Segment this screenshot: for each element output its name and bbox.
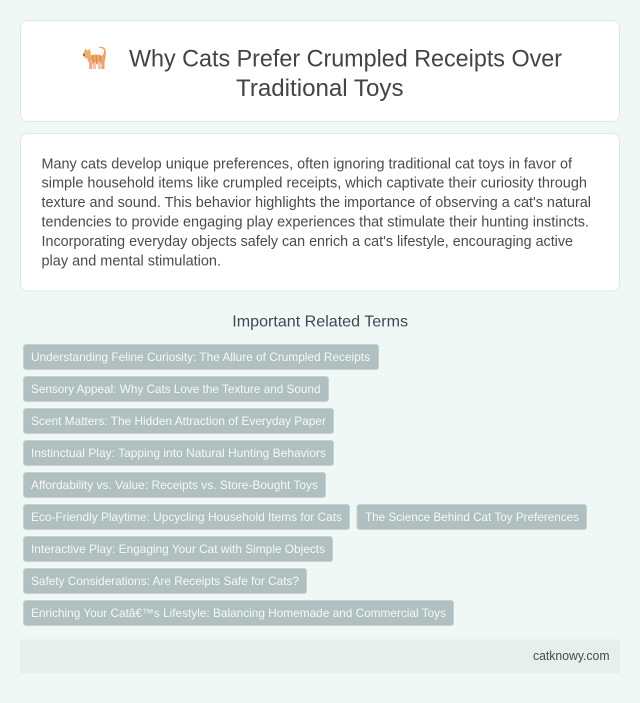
text block: description paragraph bbox=[42, 155, 591, 269]
text block: description paragraph: Incorporating everyday objects safely can enrich a cat's lifestyle, encouraging active bbox=[42, 233, 573, 250]
heading: title: Why Cats Prefer Crumpled Receipts Over bbox=[129, 46, 562, 72]
text block: description paragraph: tendencies to provide engaging play experiences that stimulate their hunting instincts. bbox=[42, 213, 589, 230]
tag: enriching lifestyle: Enriching Your Catâ€™s Lifestyle: Balancing Homemade and Commercial Toys bbox=[31, 606, 446, 620]
tag: scent matters: Scent Matters: The Hidden Attraction of Everyday Paper bbox=[31, 414, 326, 428]
text block: description paragraph: Many cats develop unique preferences, often ignoring traditional cat toys in favor of bbox=[42, 155, 573, 172]
tag: scent matters bbox=[24, 408, 334, 434]
tag: instinctual play: Instinctual Play: Tapping into Natural Hunting Behaviors bbox=[31, 446, 326, 460]
heading: title bbox=[129, 46, 562, 102]
heading: important related terms: Important Related Terms bbox=[232, 314, 408, 330]
tag: science behind preferences: The Science Behind Cat Toy Preferences bbox=[365, 510, 579, 524]
footer text: site name: catknowy.com bbox=[533, 648, 610, 663]
text block: description paragraph: texture and sound. This behavior highlights the importance of observing a cat's natural bbox=[42, 194, 591, 211]
text block: description paragraph: play and mental stimulation. bbox=[42, 252, 221, 269]
tag: feline curiosity: Understanding Feline Curiosity: The Allure of Crumpled Receipts bbox=[31, 350, 370, 364]
tag: affordability: Affordability vs. Value: Receipts vs. Store-Bought Toys bbox=[31, 478, 318, 492]
tag: interactive play bbox=[24, 536, 332, 562]
tag: safety considerations bbox=[24, 568, 306, 594]
tag: interactive play: Interactive Play: Engaging Your Cat with Simple Objects bbox=[31, 542, 325, 556]
tag: instinctual play bbox=[24, 440, 334, 466]
icon: orange cat bbox=[83, 47, 106, 69]
text block: description paragraph: simple household items like crumpled receipts, which captivate their curiosity through bbox=[42, 174, 587, 192]
panel: description card bbox=[20, 134, 620, 291]
tag: eco-friendly playtime bbox=[24, 504, 350, 530]
heading: title: Traditional Toys bbox=[236, 75, 404, 102]
tag: science behind preferences bbox=[357, 504, 586, 530]
tag: eco-friendly playtime: Eco-Friendly Playtime: Upcycling Household Items for Cats bbox=[31, 510, 342, 524]
tag list: related terms bbox=[24, 344, 586, 626]
tag: sensory appeal bbox=[24, 376, 328, 402]
tag: affordability bbox=[24, 472, 326, 498]
tag: sensory appeal: Sensory Appeal: Why Cats Love the Texture and Sound bbox=[31, 382, 320, 396]
panel: title card bbox=[20, 20, 620, 122]
tag: enriching lifestyle bbox=[24, 600, 454, 626]
tag: safety considerations: Safety Considerations: Are Receipts Safe for Cats? bbox=[31, 574, 299, 588]
tag: feline curiosity bbox=[24, 344, 378, 370]
footer bar bbox=[20, 640, 620, 673]
